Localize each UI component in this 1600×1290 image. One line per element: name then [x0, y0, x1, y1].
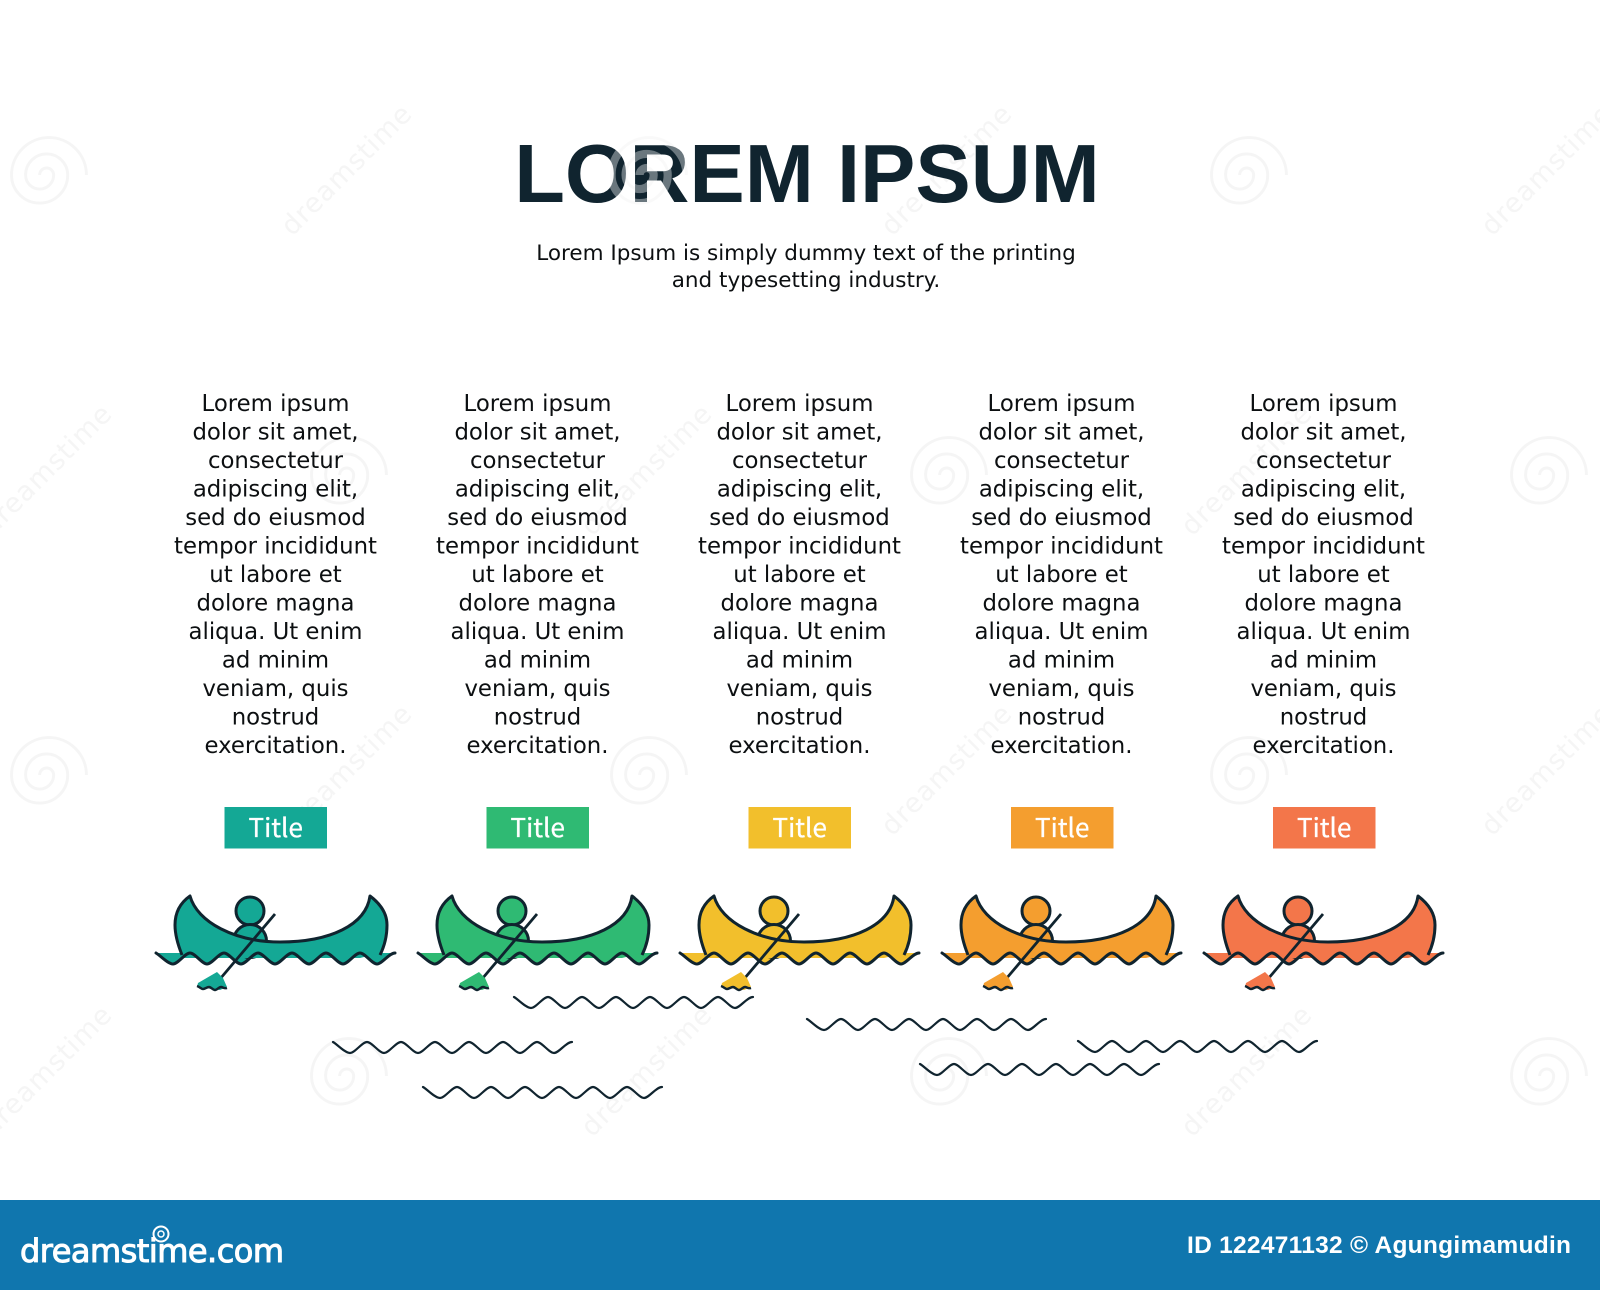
text column 5: dolore magna	[1245, 590, 1402, 616]
icon: canoe 2	[418, 896, 657, 990]
text column 4: dolore magna	[983, 590, 1140, 616]
text column 4: veniam, quis	[988, 676, 1135, 702]
title watermark overlay	[612, 138, 686, 203]
text column 2: adipiscing elit,	[455, 476, 620, 502]
text column 1: dolore magna	[197, 590, 354, 616]
text column 1: adipiscing elit,	[193, 476, 358, 502]
text column 4: adipiscing elit,	[979, 476, 1144, 502]
text column 4: Lorem ipsum	[988, 391, 1135, 417]
text column 4: ut labore et	[995, 562, 1128, 588]
text column 1: dolor sit amet,	[192, 420, 359, 446]
title tag 1: Title	[249, 808, 303, 845]
text column 5: veniam, quis	[1250, 676, 1397, 702]
text column 5: adipiscing elit,	[1241, 476, 1406, 502]
footer credit: ID 122471132 © Agungimamudin	[1187, 1232, 1571, 1259]
text column 3: adipiscing elit,	[717, 476, 882, 502]
subtitle: Lorem Ipsum is simply dummy text of the printing	[536, 241, 1076, 266]
watermark wordmarks: dreamstime	[275, 98, 419, 242]
text column 1: Lorem ipsum	[202, 391, 349, 417]
text column 5: exercitation.	[1252, 733, 1395, 759]
text column 3: aliqua. Ut enim	[713, 619, 886, 645]
water ripples	[333, 997, 1317, 1098]
text column 3: Lorem ipsum	[726, 391, 873, 417]
text column 4: consectetur	[994, 448, 1130, 474]
text column 5: dolor sit amet,	[1240, 420, 1407, 446]
watermark wordmarks: dreamstime	[875, 98, 1019, 242]
text column 5: ut labore et	[1257, 562, 1390, 588]
text column 2: ad minim	[484, 648, 591, 674]
text column 2: ut labore et	[471, 562, 604, 588]
text column 5: tempor incididunt	[1222, 534, 1425, 560]
text column 4: tempor incididunt	[960, 534, 1163, 560]
title tag 3: Title	[773, 808, 827, 845]
text column 1: veniam, quis	[202, 676, 349, 702]
text column 1: nostrud	[232, 704, 319, 730]
text column 2: tempor incididunt	[436, 534, 639, 560]
text column 1: tempor incididunt	[174, 534, 377, 560]
text column 5: Lorem ipsum	[1250, 391, 1397, 417]
watermark wordmarks: dreamstime	[275, 698, 419, 842]
icon: canoe 1	[156, 896, 395, 990]
text column 2: veniam, quis	[464, 676, 611, 702]
text column 4: dolor sit amet,	[978, 420, 1145, 446]
text column 5: aliqua. Ut enim	[1237, 619, 1410, 645]
text column 2: aliqua. Ut enim	[451, 619, 624, 645]
text column 3: dolor sit amet,	[716, 420, 883, 446]
text column 3: veniam, quis	[726, 676, 873, 702]
title tag 2: Title	[511, 808, 565, 845]
title tag 1	[224, 807, 327, 848]
text column 2: Lorem ipsum	[464, 391, 611, 417]
text column 1: sed do eiusmod	[185, 505, 366, 531]
text column 5: ad minim	[1270, 648, 1377, 674]
title tag 2	[486, 807, 589, 848]
text column 2: nostrud	[494, 704, 581, 730]
text column 3: consectetur	[732, 448, 868, 474]
text column 3: tempor incididunt	[698, 534, 901, 560]
text column 4: sed do eiusmod	[971, 505, 1152, 531]
text column 5: sed do eiusmod	[1233, 505, 1414, 531]
text column 1: ad minim	[222, 648, 329, 674]
text column 4: exercitation.	[990, 733, 1133, 759]
text column 2: sed do eiusmod	[447, 505, 628, 531]
title: LOREM IPSUM	[514, 127, 1100, 220]
text column 3: ad minim	[746, 648, 853, 674]
title tag 4: Title	[1035, 808, 1089, 845]
subtitle: and typesetting industry.	[672, 268, 940, 293]
watermark wordmarks: dreamstime	[875, 698, 1019, 842]
watermark wordmarks: dreamstime	[1175, 999, 1319, 1143]
footer bar	[0, 1200, 1600, 1290]
text column 4: aliqua. Ut enim	[975, 619, 1148, 645]
text column 5: consectetur	[1256, 448, 1392, 474]
text column 1: aliqua. Ut enim	[189, 619, 362, 645]
icon: canoe 4	[942, 896, 1181, 990]
watermark wordmarks: dreamstime	[575, 398, 719, 542]
text column 4: ad minim	[1008, 648, 1115, 674]
text column 2: consectetur	[470, 448, 606, 474]
text column 3: sed do eiusmod	[709, 505, 890, 531]
text column 2: dolor sit amet,	[454, 420, 621, 446]
text column 3: nostrud	[756, 704, 843, 730]
text column 4: nostrud	[1018, 704, 1105, 730]
text column 3: ut labore et	[733, 562, 866, 588]
text column 1: consectetur	[208, 448, 344, 474]
text column 3: dolore magna	[721, 590, 878, 616]
title tag 5: Title	[1297, 808, 1351, 845]
text column 2: dolore magna	[459, 590, 616, 616]
text column 3: exercitation.	[728, 733, 871, 759]
title tag 4	[1011, 807, 1114, 848]
text column 1: ut labore et	[209, 562, 342, 588]
text column 2: exercitation.	[466, 733, 609, 759]
title tag 5	[1273, 807, 1376, 848]
icon: canoe 3	[680, 896, 919, 990]
title tag 3	[748, 807, 851, 848]
icon: canoe 5	[1204, 896, 1443, 990]
text column 1: exercitation.	[204, 733, 347, 759]
text column 5: nostrud	[1280, 704, 1367, 730]
watermark wordmarks: dreamstime	[1175, 398, 1319, 542]
footer logo: dreamstime.com	[20, 1232, 284, 1270]
watermark wordmarks: dreamstime	[575, 999, 719, 1143]
watermark spirals	[12, 138, 1586, 1104]
